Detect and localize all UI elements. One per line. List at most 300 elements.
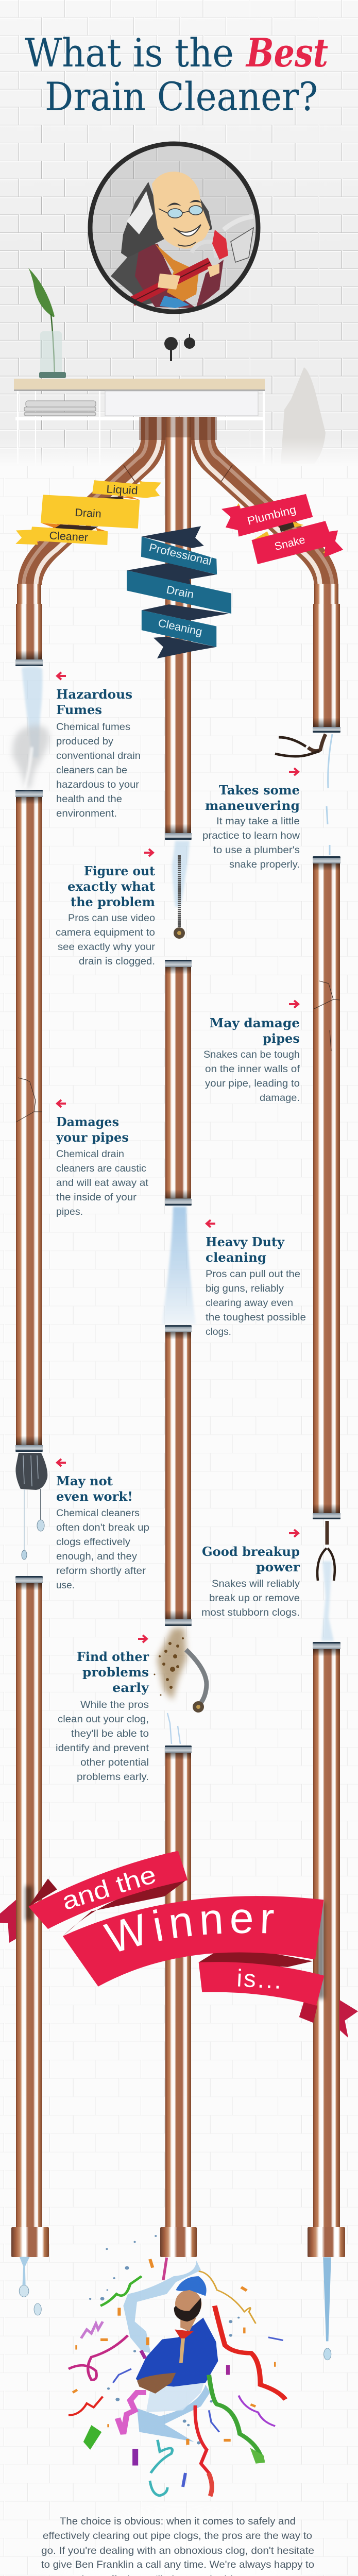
body text: pipes. (56, 1207, 83, 1217)
wood table top (14, 379, 265, 389)
middle pipe segments (160, 417, 197, 2257)
body text: clogs effectively (56, 1537, 131, 1548)
mascot: face (152, 172, 210, 249)
body text: on the inner walls of (205, 1064, 300, 1075)
debris and camera scope (154, 1628, 207, 1744)
body text: environment. (56, 808, 117, 819)
cap 3 top (165, 1325, 192, 1340)
ribbon: is (199, 1962, 324, 2006)
camera scope on cable (172, 841, 190, 939)
mascot: red wrench head (212, 230, 228, 260)
top shadow (139, 417, 167, 440)
middle pipe segment 2 (165, 967, 191, 1198)
label: Drain: Drain (75, 506, 101, 520)
body text: conventional drain (56, 751, 141, 761)
label: Snake: Snake (273, 533, 306, 553)
mirror tint (92, 145, 257, 310)
small drop (34, 2303, 41, 2315)
fade from photo to lower wall (0, 438, 358, 467)
ribbon: and the (28, 1851, 187, 1929)
cap 3 bottom (165, 1610, 192, 1626)
green ribbon right (209, 2375, 263, 2462)
heading (56, 687, 132, 717)
heading: problems (82, 1665, 149, 1680)
middle pipe segment 3 (165, 1332, 191, 1619)
water drips (327, 734, 332, 855)
drip two (37, 1489, 44, 1531)
top tail (142, 526, 204, 548)
callout: Takes some maneuvering (202, 768, 300, 870)
red tail (209, 2473, 212, 2496)
ribbon: Winner (63, 1896, 324, 1987)
ribbon: Cleaner (30, 527, 108, 545)
mascot: wrench handle (132, 262, 210, 301)
arrow (57, 1100, 66, 1107)
shirt (136, 2318, 218, 2386)
mascot: hands (158, 264, 219, 290)
lower pipe shadow (55, 524, 98, 530)
ribbon: Cleaning (142, 610, 216, 647)
background: top highlight (0, 0, 358, 258)
callout: May not even work (56, 1459, 149, 1591)
body text: produced by (56, 736, 114, 747)
towel (281, 367, 326, 464)
body text: Pros can pull out the (206, 1269, 300, 1280)
tail left (221, 505, 241, 531)
heading (202, 1544, 300, 1574)
mascot: hair (121, 182, 164, 258)
tail right (324, 530, 343, 557)
stem (323, 2257, 331, 2341)
fold upper (127, 563, 216, 585)
fold under and the (63, 1880, 186, 1936)
body text (202, 816, 300, 870)
body text: most stubborn clogs. (201, 1607, 300, 1618)
clog mass (15, 1453, 47, 1490)
purple ribbon right (238, 2396, 275, 2426)
body text: problems early. (77, 1772, 149, 1783)
mascot: orange vest (155, 244, 199, 301)
body text: big guns, reliably (206, 1283, 284, 1294)
neck (180, 2318, 196, 2331)
callout: Good breakup power (201, 1530, 300, 1618)
right tail (339, 2000, 358, 2038)
middle pipe segment 1 (165, 417, 191, 833)
body text: identify and prevent (56, 1743, 149, 1754)
body text: While the pros (80, 1700, 149, 1710)
heading (56, 1473, 133, 1504)
heading: pipes (263, 1031, 300, 1046)
closing paragraph (41, 2516, 314, 2576)
plumber with water splash and confetti (69, 2235, 285, 2473)
cap 1 (165, 824, 192, 840)
middle pipe segment 4 (165, 1752, 191, 2228)
callout: May damage pipes (203, 1001, 300, 1104)
joint (221, 465, 232, 482)
right pipe upper (314, 584, 338, 604)
purple rectangle (132, 2449, 138, 2466)
red ribbon right (215, 2306, 285, 2399)
left pipe segment 2 (16, 796, 42, 1446)
body text (56, 1508, 149, 1591)
pipe body (203, 417, 326, 585)
body text: clean out your clog, (58, 1714, 149, 1725)
body text: clogs. (206, 1327, 231, 1337)
left highlight (209, 417, 332, 585)
ribbon tail top (139, 481, 161, 498)
pink ribbon (117, 2393, 146, 2434)
clog under left pipe (15, 1453, 47, 1560)
body text: Snakes can be tough (203, 1049, 300, 1060)
cable (186, 1650, 207, 1705)
body text: Chemical drain (56, 1149, 124, 1160)
crack (16, 1078, 42, 1122)
body text: clearing away even (206, 1298, 293, 1309)
camera head (193, 1701, 204, 1713)
pipe body (30, 417, 153, 585)
orange folds (31, 480, 147, 545)
shadow under table (14, 389, 265, 391)
drips from left faucet (19, 2257, 41, 2315)
plunger cup (175, 2329, 194, 2338)
right pipe segment 2 (313, 863, 340, 1513)
gold ribbon (199, 2272, 255, 2324)
left pipe segment 3 (16, 1583, 42, 2228)
heading: even work! (56, 1489, 133, 1504)
right pipe: bent top section (189, 417, 332, 585)
water (321, 1561, 334, 1641)
drip one (22, 1489, 27, 1560)
mascot: maroon coat (135, 244, 224, 308)
body text: drain is clogged. (79, 956, 155, 967)
left highlight (24, 417, 147, 585)
cable (178, 855, 181, 927)
label: and the: and the (59, 1861, 159, 1916)
title (25, 30, 328, 120)
console table (14, 379, 265, 467)
banner: Liquid Drain Cleaner (15, 480, 161, 545)
body text: cleaners are caustic (56, 1163, 146, 1174)
magenta ribbon left (69, 2335, 128, 2380)
body text: Snakes will reliably (212, 1579, 300, 1589)
water splash upper (123, 2261, 201, 2353)
teal ribbon (151, 2440, 172, 2473)
body text: they'll be able to (71, 1728, 149, 1739)
heading: Takes some (219, 783, 300, 798)
arrow (144, 849, 153, 856)
mascot: wrench jaws (192, 216, 253, 262)
ribbon: Drain (41, 495, 140, 529)
magenta stem (163, 2258, 167, 2280)
lower confetti tails (150, 2473, 212, 2496)
yellow folds (233, 503, 331, 554)
cap 2 bottom (313, 1504, 340, 1519)
arrow (289, 1001, 298, 1008)
drip from right faucet (323, 2257, 331, 2360)
arrow (289, 768, 298, 775)
heading: Damages (56, 1114, 119, 1129)
arrow (289, 1530, 298, 1537)
confetti (72, 2259, 276, 2445)
right claw (328, 1548, 335, 1581)
purple squiggle (81, 2321, 103, 2338)
small fold right (299, 2002, 317, 2023)
label: Cleaner: Cleaner (49, 529, 89, 544)
body text: and will eat away at (56, 1178, 149, 1189)
left pipe: bent top section (24, 417, 167, 585)
closing paragraph: to give Ben Franklin a call any time. We're always happy to (41, 2560, 314, 2570)
closing paragraph: go. If you're dealing with an obnoxious clog, don't hesitate (41, 2546, 314, 2556)
heading: cleaning (206, 1250, 266, 1265)
right pipe segments (308, 584, 345, 2257)
right highlight (197, 417, 320, 585)
body text: Chemical cleaners (56, 1508, 140, 1519)
body text: damage. (260, 1093, 300, 1104)
pipe shadow (88, 496, 123, 503)
stack of plates (24, 401, 96, 416)
cap 3 top (313, 1642, 340, 1656)
body text: to use a plumber's (213, 845, 300, 856)
label: Cleaning: Cleaning (157, 617, 203, 638)
background: upper brick wall (0, 0, 358, 469)
callout: Hazardous Fumes (56, 672, 141, 819)
right pipe segment 3 (313, 1649, 340, 2228)
left claw (317, 1548, 327, 1581)
right highlight (36, 417, 159, 585)
drip stem (20, 2257, 30, 2286)
ribbon: Snake (252, 521, 334, 564)
wall faucet handles (164, 334, 195, 361)
water and fumes under left pipe (12, 666, 49, 788)
body text: health and the (56, 794, 122, 805)
arrow (207, 1220, 215, 1227)
left pipe upper (17, 584, 41, 604)
camera head (174, 927, 185, 939)
body text: break up or remove (209, 1593, 300, 1604)
heading: Fumes (56, 702, 102, 717)
left pipe segment 1 (16, 604, 42, 660)
heading: May not (56, 1473, 113, 1488)
beard (174, 2298, 201, 2321)
large drop (19, 2285, 29, 2297)
cap 3 top (15, 1576, 43, 1590)
plant in vase (28, 268, 66, 378)
pipe shadow (272, 501, 297, 532)
fold over is (199, 1951, 313, 1967)
label: Winner: Winner (103, 1909, 274, 1952)
mirror with Benjamin Franklin mascot (90, 144, 258, 312)
body text: It may take a little (216, 816, 300, 827)
banner: Professional Drain Cleaning (127, 526, 231, 658)
cap 2 top (165, 960, 192, 974)
closing paragraph: effectively clearing out pipe clogs, the pros are the way to (43, 2531, 312, 2541)
arrow (138, 1635, 147, 1642)
body text (56, 1149, 149, 1217)
body text (201, 1579, 300, 1618)
ribbon: Drain (127, 570, 231, 614)
body text: reform shortly after (56, 1566, 146, 1577)
body text: hazardous to your (56, 779, 140, 790)
left faucet collar (11, 2227, 49, 2257)
heading: May damage (210, 1015, 300, 1030)
baseline path for Winner (111, 1933, 281, 1955)
callout: Heavy Duty cleaning (206, 1220, 306, 1337)
top shadow (165, 417, 191, 437)
body text: snake properly. (229, 859, 300, 870)
heading: maneuvering (205, 798, 300, 813)
body text: enough, and they (56, 1551, 138, 1562)
heading (210, 1015, 300, 1046)
vase (40, 331, 62, 378)
heading: exactly what (67, 879, 155, 894)
heading: Find other (77, 1649, 149, 1664)
drop (324, 2348, 331, 2360)
middle faucet collar (160, 2227, 197, 2257)
crack (314, 981, 340, 1051)
fumes core (25, 747, 32, 788)
mascot: glasses (159, 206, 202, 218)
body text: your pipe, leading to (205, 1078, 300, 1089)
stem (51, 314, 55, 375)
heading: Figure out (84, 863, 155, 878)
red squiggle left (69, 2397, 103, 2415)
fumes (12, 725, 49, 788)
green ribbon left (100, 2276, 142, 2306)
body text: other potential (80, 1757, 149, 1768)
tap (184, 334, 195, 349)
bottom tail (154, 637, 216, 658)
plunger stick (179, 2338, 185, 2363)
drain snake lower head (317, 1521, 335, 1641)
mascot: white hair highlight (127, 191, 153, 234)
heading: the problem (71, 894, 155, 909)
mascot: right hair (198, 196, 212, 232)
banner: Plumbing Snake (221, 494, 343, 564)
heading (205, 783, 300, 813)
teal tail (150, 2481, 167, 2496)
heading: your pipes (56, 1130, 129, 1145)
body text: camera equipment to (56, 927, 155, 938)
body text: the inside of your (56, 1192, 137, 1203)
prong one (279, 737, 306, 747)
left pipe segments (11, 584, 49, 2257)
small fold left (28, 1878, 57, 1907)
blue squiggles (113, 2337, 283, 2432)
coil (308, 734, 326, 751)
cap 2 top (313, 856, 340, 871)
water bubbles (89, 2235, 240, 2445)
cap 2 bottom (165, 1190, 192, 1206)
forearms (137, 2373, 176, 2394)
callout: Figure out exactly what the problem (56, 849, 156, 967)
water jet between middle pipes (162, 1207, 196, 1324)
label: Drain: Drain (165, 583, 195, 601)
arrow (57, 1459, 66, 1466)
face (175, 2290, 201, 2318)
body text (203, 1049, 300, 1104)
mascot: smile (174, 225, 201, 236)
heading: Heavy Duty (206, 1234, 285, 1249)
label: Liquid: Liquid (106, 483, 138, 497)
body text: practice to learn how (202, 831, 300, 841)
callout: Find other problems early (56, 1635, 149, 1783)
left tail (0, 1900, 16, 1943)
right pipe segment 1 (313, 604, 340, 727)
pipe shadows (26, 1886, 324, 1998)
mirror frame (90, 144, 258, 312)
body text (56, 722, 141, 819)
table legs and frame (15, 389, 265, 467)
clog streaks (23, 1455, 38, 1486)
title line one: What is the (25, 30, 234, 76)
arrow (57, 672, 66, 680)
body text (56, 913, 156, 967)
callout: Damages your pipes (56, 1100, 149, 1217)
body text (206, 1269, 306, 1337)
water drips (167, 1713, 180, 1744)
heading: early (112, 1680, 149, 1695)
red ribbon lower (195, 2405, 209, 2473)
heading (56, 1114, 129, 1145)
body text: Chemical fumes (56, 722, 130, 733)
mascot: coat shadow (111, 244, 183, 305)
label: Plumbing: Plumbing (246, 503, 297, 528)
blue tail (183, 2473, 185, 2487)
fold lower (142, 604, 229, 620)
mascot: brows (167, 200, 202, 207)
cap (176, 2276, 207, 2296)
heading: power (256, 1560, 300, 1574)
cap 2 bottom (15, 1436, 43, 1452)
prong two (275, 751, 319, 756)
body text: use. (56, 1580, 75, 1591)
drawer (105, 391, 258, 416)
vase base (39, 372, 66, 378)
title emphasis: Best: Best (245, 30, 328, 76)
heading (67, 863, 155, 909)
heading: Hazardous (56, 687, 132, 702)
heading (206, 1234, 285, 1265)
cap 1 (15, 650, 43, 666)
ribbon: Professional (141, 536, 217, 574)
ribbon: Plumbing (235, 494, 313, 536)
water fade over torso (146, 2341, 217, 2412)
body text: often don't break up (56, 1522, 149, 1533)
body text: cleaners can be (56, 765, 127, 776)
ribbon tail bottom (15, 530, 38, 545)
banner: and the Winner is (0, 1851, 358, 2038)
water stream (22, 666, 42, 757)
ribbon: Liquid (92, 480, 147, 498)
heading (77, 1649, 149, 1695)
mirror glass (92, 145, 257, 310)
closing paragraph: The choice is obvious: when it comes to safely and (60, 2516, 296, 2527)
label: is: is... (236, 1964, 282, 1994)
body text (56, 1700, 149, 1783)
debris speckles (154, 1637, 184, 1696)
body text: the toughest possible (206, 1312, 306, 1323)
water around cable (172, 841, 190, 907)
mascot: chin line (178, 242, 196, 246)
cap 2 top (15, 790, 43, 804)
body text: see exactly why your (58, 942, 156, 953)
cap 4 top (165, 1745, 192, 1760)
top shadow (189, 417, 217, 440)
body text: Pros can use video (68, 913, 155, 924)
leaf (28, 268, 55, 317)
heading: Good breakup (202, 1544, 300, 1559)
coil (326, 1521, 329, 1545)
